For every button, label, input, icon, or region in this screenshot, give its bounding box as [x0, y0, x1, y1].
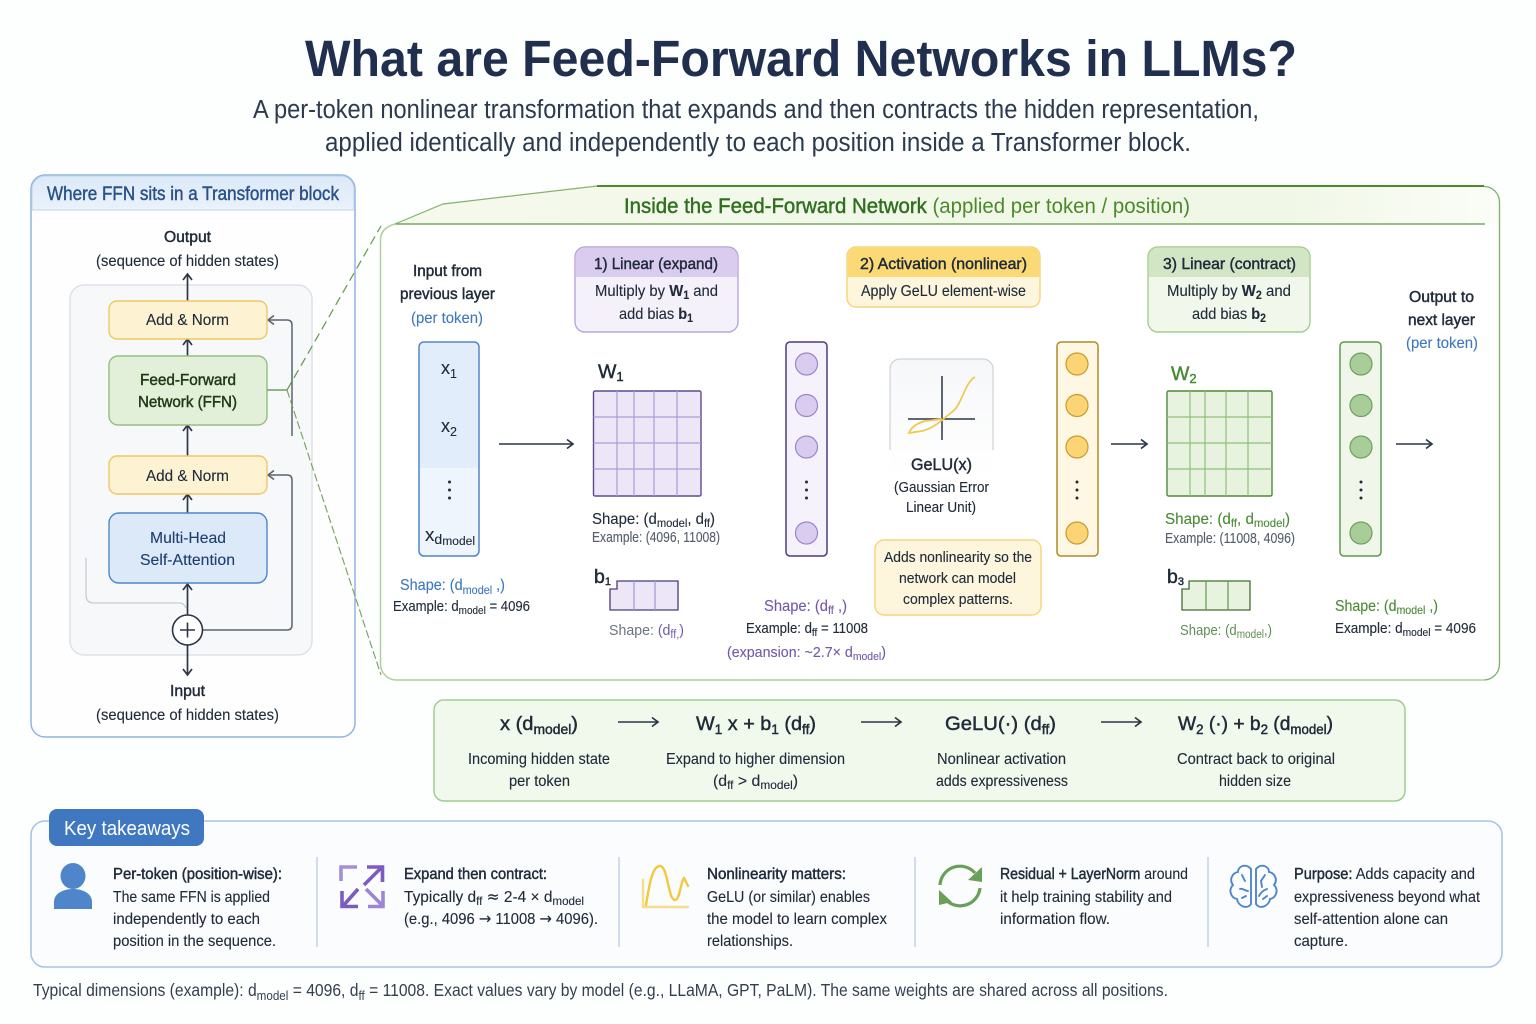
input shape: ,)	[492, 577, 505, 594]
card: activation: Apply GeLU element-wise	[861, 283, 1026, 300]
input vector: x	[441, 358, 450, 378]
arrow	[618, 721, 658, 723]
box: multi-head self-attention	[109, 513, 267, 583]
output label: (per token)	[1406, 335, 1478, 352]
W1 shape: Shape: (d	[592, 511, 661, 528]
callout: nonlinearity note: complex patterns.	[903, 591, 1013, 608]
matrix W1	[594, 361, 701, 496]
step: x: )	[571, 713, 578, 735]
step: W2: )	[1327, 713, 1333, 735]
input label: (per token)	[411, 310, 483, 327]
box: multi-head self-attention: Self-Attention	[140, 552, 235, 569]
bias b3	[1167, 566, 1250, 610]
W2 shape: model	[1254, 516, 1285, 530]
footnote: ff	[358, 988, 365, 1003]
W1 shape: model	[657, 516, 687, 530]
input label: (sequence of hidden states)	[96, 707, 279, 724]
box: feed-forward network	[109, 356, 267, 425]
input vector: x	[425, 525, 434, 545]
step: W1 x + b1: 1	[771, 722, 779, 737]
bias b3: b	[1167, 566, 1178, 588]
box: add and norm lower	[109, 456, 267, 494]
takeaway: expand then contract	[404, 866, 598, 928]
step: x: x (d	[500, 713, 533, 735]
output label: next layer	[1408, 312, 1476, 329]
step: W1 x + b1: W	[696, 713, 714, 735]
W1 shape: ff	[704, 516, 711, 530]
arrow: activation to W2	[1111, 443, 1147, 445]
purple vector shape: model	[853, 651, 881, 663]
W2 shape: ff	[1231, 516, 1238, 530]
b3 shape: model	[1237, 629, 1264, 641]
takeaway: per-token	[113, 866, 282, 950]
box: add and norm lower: Add & Norm	[146, 468, 229, 485]
matrix W1: W	[598, 361, 616, 383]
card: linear expand: 1) Linear (expand)	[594, 256, 718, 273]
matrix W2: W	[1171, 363, 1189, 385]
step: GeLU: )	[1049, 713, 1056, 735]
residual arrows	[202, 320, 292, 630]
takeaway: nonlinearity: relationships.	[707, 933, 793, 950]
step: x: Incoming hidden state	[468, 751, 610, 768]
step: x	[468, 713, 610, 790]
takeaway: purpose: Purpose: Adds capacity and	[1294, 866, 1475, 883]
takeaway: expand then contract: Typically d	[404, 889, 479, 906]
footnote: = 11008. Exact values vary by model (e.g., LLaMA, GPT, PaLM). The same weights are shared across all positions.	[365, 980, 1168, 1000]
step: W2	[1177, 713, 1335, 790]
badge: key takeaways	[49, 809, 204, 846]
takeaway: per-token: position in the sequence.	[113, 933, 276, 950]
purple vector shape: ,)	[834, 598, 847, 615]
input vector: model	[442, 536, 475, 548]
W2 shape	[1165, 511, 1295, 547]
step: W1 x + b1	[666, 713, 845, 792]
takeaway: per-token: Per-token (position-wise):	[113, 866, 282, 883]
input label: Input from	[413, 263, 482, 280]
step: W1 x + b1: (d	[779, 713, 802, 735]
input shape: model	[463, 583, 492, 597]
card: linear contract: 2	[1256, 290, 1262, 302]
callout: nonlinearity note	[875, 540, 1041, 615]
panel heading	[32, 176, 354, 210]
purple vector shape: Shape: (d	[764, 598, 833, 615]
purple vector shape	[727, 598, 886, 663]
card: linear expand: add bias b	[619, 306, 688, 323]
takeaway: residual	[1000, 866, 1188, 928]
takeaway: per-token: independently to each	[113, 911, 260, 928]
arrow: input to W1	[499, 443, 573, 445]
bias b1	[594, 566, 678, 610]
takeaway: purpose	[1294, 866, 1481, 950]
takeaway: expand then contract: Expand then contract:	[404, 866, 547, 883]
step: W2: model	[1290, 722, 1327, 737]
step: W2: 2	[1261, 722, 1268, 737]
input vector: 1	[450, 367, 457, 381]
card: linear expand: 1	[683, 290, 690, 302]
bias b1: b	[594, 566, 605, 588]
step: W1 x + b1: Expand to higher dimension	[666, 751, 845, 768]
arrow: output	[1396, 443, 1432, 445]
step: W2: Contract back to original	[1177, 751, 1335, 768]
icon: activation curve	[643, 866, 688, 907]
card: linear contract: and	[1262, 283, 1291, 300]
takeaway: nonlinearity: Nonlinearity matters:	[707, 866, 846, 883]
input shape: Shape: (d	[400, 577, 469, 594]
takeaway: residual: it help training stability and	[1000, 889, 1172, 906]
takeaway: expand then contract: ff	[476, 894, 483, 908]
purple vector shape: (expansion: ~2.7× d	[727, 644, 860, 661]
output shape	[1335, 598, 1476, 639]
subtitle: A per-token nonlinear transformation that expands and then contracts the hidden representation,	[253, 96, 1259, 124]
box: feed-forward network: Network (FFN)	[138, 394, 237, 411]
step: W1 x + b1: )	[809, 713, 816, 735]
W1 shape: Example: (4096, 11008)	[592, 530, 720, 546]
input label	[96, 683, 279, 724]
panel heading: Where FFN sits in a Transformer block	[47, 183, 339, 205]
input shape: = 4096	[486, 599, 530, 615]
purple vector shape: Example: d	[746, 621, 819, 637]
step: W2: 2	[1196, 722, 1204, 737]
step: W2: (d	[1268, 713, 1290, 735]
W1 shape: )	[710, 511, 715, 528]
step: x: model	[533, 722, 571, 737]
chart: GeLU curve: Linear Unit)	[906, 499, 976, 516]
input vector: d	[434, 532, 442, 547]
bias b1: 1	[605, 576, 611, 588]
icon: brain	[1230, 866, 1277, 907]
takeaway: residual: information flow.	[1000, 911, 1110, 928]
card: activation	[847, 247, 1040, 307]
takeaway: purpose: expressiveness beyond what	[1294, 889, 1481, 906]
panel: inside the feed-forward network	[380, 186, 1500, 680]
step: W2: W	[1178, 713, 1196, 735]
purple vector shape: ff	[812, 627, 818, 639]
panel: where FFN sits	[31, 175, 355, 737]
takeaway: expand then contract: (e.g., 4096 → 11008 → 4096).	[404, 909, 598, 928]
output label: Output to	[1409, 289, 1474, 306]
icon: expand arrows	[341, 867, 383, 906]
input shape	[393, 577, 530, 617]
card: linear expand: 1	[687, 313, 694, 325]
card: linear contract: 3) Linear (contract)	[1163, 256, 1296, 273]
step: W1 x + b1: )	[793, 773, 798, 790]
footnote: = 4096, d	[288, 980, 358, 1000]
input shape: Example: d	[393, 599, 466, 615]
input label: Input	[170, 683, 206, 700]
chart: GeLU curve: (Gaussian Error	[894, 479, 989, 496]
callout: nonlinearity note: network can model	[899, 570, 1016, 587]
green vector	[1340, 342, 1381, 556]
step: W1 x + b1: model	[760, 778, 793, 792]
step: W1 x + b1: 1	[715, 722, 722, 737]
title: What are Feed-Forward Networks in LLMs?	[305, 30, 1297, 87]
panel: formula flow	[434, 700, 1405, 801]
output label: Output	[164, 229, 212, 246]
box: add and norm top: Add & Norm	[146, 312, 229, 329]
purple vector shape: ff	[828, 603, 835, 617]
step: W1 x + b1: > d	[733, 773, 760, 790]
step: W1 x + b1: ff	[727, 778, 734, 792]
step: W1 x + b1: x + b	[722, 713, 771, 735]
card: linear expand: Multiply by W	[595, 283, 684, 300]
output label	[1406, 289, 1478, 352]
step: GeLU: ff	[1042, 722, 1050, 737]
card: linear contract: 2	[1260, 313, 1266, 325]
b3 shape: ,)	[1264, 622, 1272, 639]
light residual line	[86, 558, 186, 608]
card: activation: 2) Activation (nonlinear)	[860, 256, 1027, 273]
transformer block background	[70, 285, 312, 655]
card: linear expand	[575, 247, 738, 332]
arrow	[1101, 721, 1141, 723]
panel: key takeaways	[31, 809, 1502, 967]
footnote: Typical dimensions (example): d	[33, 980, 283, 1000]
purple vector shape: = 11008	[817, 621, 868, 637]
subtitle	[253, 96, 1259, 157]
box: multi-head self-attention: Multi-Head	[150, 530, 226, 547]
bias b3: 3	[1178, 576, 1184, 588]
matrix W1: 1	[616, 369, 624, 384]
step: x: per token	[509, 773, 570, 790]
b1 shape: Shape: (d	[609, 622, 671, 639]
input shape: model	[459, 605, 486, 617]
takeaway: nonlinearity: GeLU (or similar) enables	[707, 889, 870, 906]
subtitle: applied identically and independently to each position inside a Transformer block.	[325, 129, 1191, 157]
takeaway: purpose: self-attention alone can	[1294, 911, 1448, 928]
W1 shape: , d	[687, 511, 704, 528]
output shape: ,)	[1425, 598, 1438, 615]
output shape: model	[1396, 603, 1425, 617]
badge: key takeaways: Key takeaways	[64, 817, 190, 840]
input label: previous layer	[400, 286, 496, 303]
takeaway: purpose: capture.	[1294, 933, 1348, 950]
matrix W2	[1167, 363, 1272, 496]
purple vector	[786, 342, 827, 556]
W2 shape: Example: (11008, 4096)	[1165, 531, 1295, 547]
input vector: 2	[450, 425, 457, 439]
output label	[96, 229, 279, 270]
output shape: model	[1403, 627, 1431, 639]
icon: sum circle	[172, 615, 202, 645]
step: GeLU: GeLU(·) (d	[945, 713, 1038, 735]
icon: residual loop	[939, 866, 982, 906]
output shape: Example: d	[1335, 621, 1408, 637]
chart: GeLU curve	[890, 359, 993, 516]
flow arrows	[186, 274, 188, 675]
W2 shape: , d	[1237, 511, 1254, 528]
b3 shape: Shape: (d	[1180, 622, 1245, 639]
step: W1 x + b1: (d	[713, 773, 727, 790]
step: W2: (·) + b	[1204, 713, 1261, 735]
callout: nonlinearity note: Adds nonlinearity so the	[884, 549, 1032, 566]
box: add and norm top	[109, 301, 267, 339]
icon: person	[54, 863, 92, 909]
input vector	[419, 342, 479, 556]
card: linear contract: Multiply by W	[1167, 283, 1257, 300]
output label: (sequence of hidden states)	[96, 253, 279, 270]
step: W1 x + b1: ff	[802, 722, 810, 737]
matrix W2: 2	[1189, 371, 1197, 386]
output shape: = 4096	[1431, 621, 1476, 637]
takeaway: expand then contract: model	[552, 894, 584, 908]
step: GeLU	[936, 713, 1068, 790]
takeaway: expand then contract: ≈ 2-4 × d	[487, 887, 554, 906]
input label	[400, 263, 496, 327]
card: linear contract: add bias b	[1192, 306, 1261, 323]
panel heading band	[395, 186, 1499, 224]
step: GeLU: adds expressiveness	[936, 773, 1068, 790]
step: W2: hidden size	[1219, 773, 1291, 790]
output shape: Shape: (d	[1335, 598, 1404, 615]
footnote: model	[257, 988, 288, 1003]
card: linear expand: and	[689, 283, 718, 300]
connector: FFN to detail panel	[267, 226, 381, 675]
box: feed-forward network: Feed-Forward	[140, 372, 236, 389]
takeaway: residual: Residual + LayerNorm around	[1000, 866, 1188, 883]
panel heading band: Inside the Feed-Forward Network (applied per token / position)	[624, 194, 1190, 218]
takeaway: per-token: The same FFN is applied	[113, 889, 270, 906]
purple vector shape: )	[881, 644, 886, 661]
W2 shape: )	[1285, 511, 1290, 528]
takeaway: nonlinearity	[707, 866, 887, 950]
arrow	[861, 721, 901, 723]
W2 shape: Shape: (d	[1165, 511, 1234, 528]
b1 shape: )	[679, 622, 684, 639]
yellow vector	[1057, 342, 1098, 556]
b1 shape: ff,	[670, 629, 679, 641]
input vector: x	[441, 416, 450, 436]
takeaway: nonlinearity: the model to learn complex	[707, 911, 887, 928]
W1 shape	[592, 511, 720, 546]
chart: GeLU curve: GeLU(x)	[911, 455, 972, 474]
card: linear contract	[1148, 247, 1310, 332]
step: GeLU: Nonlinear activation	[937, 751, 1066, 768]
